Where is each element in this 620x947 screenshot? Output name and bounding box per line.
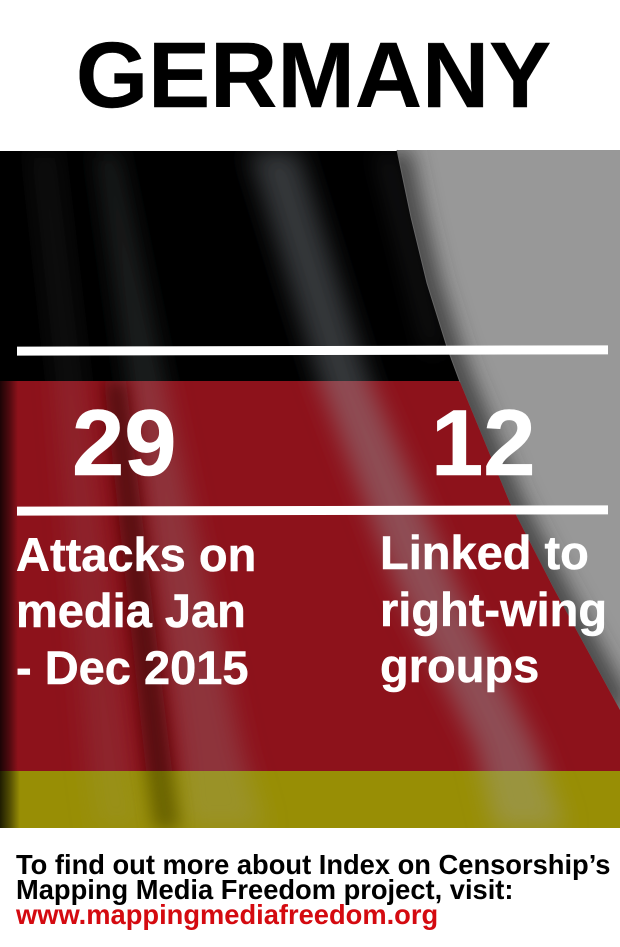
stat: 12: 12 bbox=[431, 390, 536, 495]
red stripe bbox=[0, 381, 620, 771]
label: attacks: media Jan bbox=[16, 584, 246, 637]
title: GERMANY bbox=[76, 23, 551, 127]
label: right-wing: right-wing bbox=[380, 582, 607, 636]
curtain flag illustration bbox=[0, 150, 620, 828]
label: right-wing: groups bbox=[380, 639, 539, 692]
label: right-wing: Linked to bbox=[380, 526, 589, 579]
top rule bbox=[17, 345, 608, 355]
footer text: www.mappingmediafreedom.org bbox=[16, 899, 438, 930]
label: attacks: - Dec 2015 bbox=[16, 640, 249, 694]
middle rule bbox=[17, 505, 608, 515]
black stripe bbox=[0, 151, 459, 381]
footer text bbox=[16, 849, 610, 930]
label: attacks bbox=[16, 528, 256, 694]
label: right-wing bbox=[380, 526, 607, 692]
yellow stripe bbox=[0, 771, 620, 828]
label: attacks: Attacks on bbox=[16, 528, 256, 580]
stat: 29: 29 bbox=[72, 390, 177, 495]
gray drape with shadow bbox=[397, 150, 620, 710]
footer text: Mapping Media Freedom project, visit: bbox=[16, 874, 513, 905]
footer text: To find out more about Index on Censorship’s bbox=[16, 849, 610, 880]
